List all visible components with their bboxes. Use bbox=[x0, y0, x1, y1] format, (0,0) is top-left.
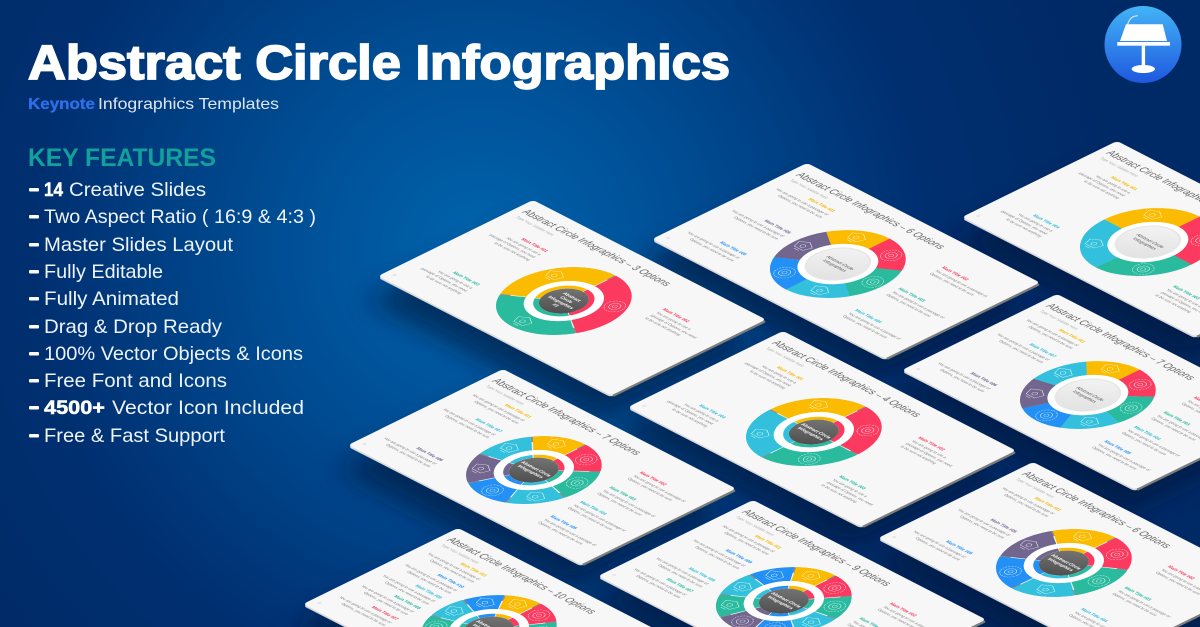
slide: 6 options, top centre: Infographics bbox=[820, 259, 848, 273]
slide: 6 options, top centre: You are going to use a passage of bbox=[890, 290, 947, 319]
slide: 10 options: Options, you need to be sure bbox=[428, 559, 477, 584]
slide: 7 options, left: Abstract Circle bbox=[519, 461, 553, 478]
slide: 7 options, left: Options, you need to be sure bbox=[566, 506, 615, 531]
slide: 10 options: Main Title #10 bbox=[436, 573, 466, 589]
slide: 6 options, top centre: You are going to use a passage of bbox=[774, 187, 831, 216]
slide: 7 options, right: Main Title #07 bbox=[1028, 343, 1058, 358]
slide: 10 options: Main Title #01 bbox=[459, 562, 489, 577]
slide: 7 options, right: Main Title #04 bbox=[1132, 425, 1163, 441]
slide: 7 options, right: Options, you need to be sure bbox=[1120, 431, 1169, 456]
slide: 6 options, top centre: Options, you need to be sure bbox=[732, 216, 781, 241]
slide: 4 options, centre: Type Your Subtitle Here bbox=[764, 346, 806, 368]
slide: 4 options, centre: Infographics bbox=[795, 426, 825, 441]
slide: 6 options, bottom right: Type Your Subtitle Here bbox=[1014, 477, 1056, 499]
slide: 7 options, right: You are going to use a passage of bbox=[936, 362, 993, 390]
slide: 9 options: Options, you need to be sure bbox=[694, 545, 742, 570]
slide: 10 options: Abstract Circle Infographics – 10 Options bbox=[443, 536, 599, 616]
slide: 6 options, top centre: Abstract Circle bbox=[824, 255, 856, 271]
slide: 9 options: Main Title #09 bbox=[724, 549, 754, 564]
slide: 7 options, left: You are going to use a passage of bbox=[382, 437, 439, 465]
slide: 7 options, left: You are going to use a passage of bbox=[632, 474, 688, 503]
slide: 10 options: Main Title #09 bbox=[414, 584, 444, 600]
slide: 3 options: Infographics bbox=[546, 295, 575, 310]
slide: 4 options, centre: to be sure not anything bbox=[820, 484, 860, 504]
slide: 7 options, right: Options, you need to be sure bbox=[1091, 446, 1139, 471]
slide: 9 options: Options, you need to be sure bbox=[723, 531, 771, 556]
slide: 4 options, centre: You are going to use a bbox=[760, 365, 799, 384]
slide: 10 options: You are going to use a passage of bbox=[403, 563, 460, 592]
slide: 6 options, top centre: Type Your Subtitle Here bbox=[788, 178, 830, 200]
slide: 4 options, centre: passage of Options, you need bbox=[666, 400, 716, 425]
slide: 4 options, centre: Main Title #01 bbox=[775, 366, 805, 381]
slide: 3 options: Type Your Subtitle Here bbox=[514, 215, 556, 237]
slide: 7 options, left: You are going to use a passage of bbox=[441, 408, 498, 437]
slide: 7 options, left: Main Title #02 bbox=[638, 471, 668, 486]
slide: 4 options, top right: Infographics bbox=[1130, 237, 1158, 251]
feature list: 14 bbox=[44, 179, 63, 201]
slide: 4 options, centre: You are going to use a bbox=[682, 403, 721, 423]
feature list bbox=[29, 179, 316, 447]
slide: 4 options, centre: to be sure not anything bbox=[748, 370, 788, 390]
slide: 10 options: You are going to use a passage of bbox=[381, 574, 438, 603]
feature list: 4500+ bbox=[44, 397, 105, 419]
slide: 7 options, left: Abstract Circle Infographics – 7 Options bbox=[488, 377, 644, 457]
slide: 6 options, bottom right: Main Title #02 bbox=[1166, 565, 1196, 580]
slide: 10 options: You are going to use a passage of bbox=[338, 595, 394, 624]
slide: 6 options, top centre: Options, you need to be sure bbox=[841, 314, 890, 339]
slide: 4 options, centre: to be sure not anything bbox=[671, 408, 710, 428]
slide: 4 options, top right: Main Title #01 bbox=[1109, 176, 1139, 191]
slide: 3 options: Main Title #01 bbox=[520, 237, 550, 253]
slide: 3 options: passage of Options, you need bbox=[649, 314, 699, 339]
slide: 7 options, left: You are going to use a passage of bbox=[601, 489, 658, 518]
slide: 7 options, left: You are going to use a passage of bbox=[471, 393, 527, 422]
feature list: Fully Animated bbox=[44, 288, 179, 310]
slide: 6 options, top centre: You are going to use a passage of bbox=[934, 269, 990, 298]
slide: 6 options, top centre: You are going to use a passage of bbox=[686, 231, 742, 260]
slide: 4 options, centre: passage of Options, you need bbox=[743, 362, 794, 387]
slide: 6 options, top centre: You are going to use a passage of bbox=[847, 312, 903, 341]
slide: 10 options: You are going to use a passage of bbox=[426, 552, 483, 581]
icon: keynote bbox=[1104, 6, 1182, 83]
slide: 7 options, right: Options, you need to be sure bbox=[998, 339, 1046, 364]
slide: 4 options, top right: passage of Options, you need bbox=[1077, 172, 1128, 197]
slide: 3 options: Main Title #03 bbox=[451, 271, 482, 286]
slide: 7 options, right: Main Title #01 bbox=[1057, 328, 1087, 344]
slide: 7 options, right: Options, you need to be sure bbox=[1150, 417, 1198, 442]
slide: 4 options, centre: Abstract Circle Infographics – 4 Options bbox=[768, 339, 924, 419]
slide: 9 options: Abstract Circle bbox=[769, 592, 803, 609]
slide: 3 options: You are going to use a bbox=[436, 270, 475, 290]
slide: 10 options: Options, you need to be sure bbox=[362, 591, 411, 616]
slide: 10 options bbox=[303, 528, 691, 627]
feature list: 100% Vector Objects & Icons bbox=[44, 343, 303, 365]
slide: 6 options, top centre: Main Title #03 bbox=[897, 287, 927, 303]
slide: 7 options, left: Options, you need to be sure bbox=[473, 400, 521, 425]
slide: 6 options, top centre: Main Title #02 bbox=[940, 266, 970, 281]
feature list: Drag & Drop Ready bbox=[44, 316, 222, 338]
slide: 9 options: Options, you need to be sure bbox=[657, 563, 705, 588]
slide: 6 options, top centre: Options, you need to be sure bbox=[688, 238, 737, 262]
slide: 9 options: Infographics bbox=[765, 595, 795, 610]
slide: 6 options, bottom right: You are going to use a passage of bbox=[1116, 589, 1173, 618]
slide: 7 options, left: Main Title #03 bbox=[608, 486, 638, 501]
slide: 9 options: You are going to use a passage of bbox=[632, 568, 689, 596]
slide: 7 options, right: Options, you need to be sure bbox=[939, 368, 987, 393]
slide: 3 options bbox=[378, 200, 766, 397]
slide: 7 options, left: Options, you need to be sure bbox=[626, 477, 675, 502]
slide: 6 options, bottom right: You are going to use a passage of bbox=[912, 530, 968, 559]
subtitle: Keynote bbox=[28, 96, 95, 113]
slide shadows bbox=[291, 165, 1200, 627]
feature list: Fully Editable bbox=[44, 261, 163, 283]
slide: 3 options: passage of Options, you need bbox=[488, 233, 538, 259]
slide: 7 options, right: You are going to use a passage of bbox=[1126, 429, 1182, 457]
slide: 10 options: Options, you need to be sure bbox=[405, 570, 454, 595]
slide: 4 options, top right: You are going to use a bbox=[1016, 213, 1055, 233]
slide: 9 options: You are going to use a passage of bbox=[721, 524, 777, 553]
slide: 9 options: Main Title #01 bbox=[753, 534, 783, 550]
slide: 4 options, centre: passage of Options, you need bbox=[905, 442, 955, 468]
slide: 6 options, bottom right: Infographics bbox=[1045, 557, 1075, 572]
slide: 7 options, right: You are going to use a passage of bbox=[1096, 443, 1153, 472]
slide: 7 options, right bbox=[902, 294, 1200, 491]
slide: 6 options, bottom right: Main Title #04 bbox=[1079, 608, 1110, 623]
slide: 7 options, left: Main Title #07 bbox=[474, 418, 504, 433]
heading: key features: KEY FEATURES bbox=[28, 144, 216, 172]
feature list: Free Font and Icons bbox=[44, 370, 227, 392]
slide: 7 options, left: Main Title #06 bbox=[415, 447, 445, 462]
slide: 4 options, centre: Abstract Circle bbox=[799, 423, 833, 440]
slide: 6 options, bottom right: Abstract Circle Infographics – 6 Options bbox=[1018, 470, 1174, 550]
slide: 7 options, right: Main Title #05 bbox=[1103, 440, 1133, 455]
slide: 4 options, top right: passage of Options, you need bbox=[1000, 210, 1050, 235]
slide: 4 options, centre: to be sure not anything bbox=[899, 445, 939, 465]
slide: 6 options, bottom right: You are going to use a passage of bbox=[956, 508, 1013, 537]
slide: 10 options: Main Title #08 bbox=[393, 595, 423, 610]
feature list: Creative Slides bbox=[69, 179, 206, 201]
slide: 9 options: Main Title #07 bbox=[665, 578, 695, 593]
slide: 10 options: Type Your Subtitle Here bbox=[439, 543, 481, 565]
slide: 9 options bbox=[598, 500, 986, 627]
slide: 4 options, centre: You are going to use a bbox=[831, 478, 870, 498]
slide: 7 options, right: You are going to use a passage of bbox=[995, 333, 1052, 362]
slide: 7 options, left: Options, you need to be sure bbox=[385, 443, 433, 468]
slide: 10 options: Options, you need to be sure bbox=[340, 602, 388, 627]
slide: 6 options, top centre: Options, you need to be sure bbox=[928, 272, 977, 297]
slide: 6 options, top centre: Options, you need to be sure bbox=[777, 194, 825, 219]
slide: 7 options, left: Options, you need to be sure bbox=[537, 521, 585, 546]
feature list: Free & Fast Support bbox=[44, 425, 226, 447]
slide: 7 options, right: You are going to use a passage of bbox=[1025, 318, 1081, 347]
slide: 7 options, right: Infographics bbox=[1070, 390, 1098, 404]
slide: 4 options, centre bbox=[628, 331, 1016, 528]
slide: 7 options, left: Options, you need to be sure bbox=[444, 414, 492, 439]
slide: 4 options, top right: You are going to use a bbox=[1094, 175, 1133, 194]
feature list: Two Aspect Ratio ( 16:9 & 4:3 ) bbox=[44, 206, 316, 228]
slide: 4 options, top right: Main Title #04 bbox=[1031, 214, 1062, 229]
slide: 9 options: You are going to use a passage of bbox=[691, 539, 748, 568]
slide: 6 options, bottom right: Main Title #03 bbox=[1123, 586, 1153, 602]
slide: 6 options, top centre bbox=[652, 163, 1040, 360]
slide: 9 options: Abstract Circle Infographics – 9 Options bbox=[738, 508, 894, 588]
slide: 4 options, top right: to be sure not anything bbox=[1082, 180, 1122, 200]
slide: 7 options, left: Type Your Subtitle Here bbox=[484, 384, 526, 406]
slide: 6 options, top centre: Options, you need to be sure bbox=[885, 293, 933, 318]
slide: 9 options: Type Your Subtitle Here bbox=[734, 515, 776, 537]
slide: 7 options, left bbox=[348, 369, 736, 566]
slide: 4 options, top right: Abstract Circle bbox=[1134, 233, 1166, 249]
slide: 9 options: Main Title #08 bbox=[687, 567, 717, 582]
slide: 3 options: Abstract bbox=[561, 292, 583, 303]
feature list: Master Slides Layout bbox=[44, 234, 234, 256]
slide: 9 options: Main Title #02 bbox=[888, 602, 918, 617]
slide: 7 options, left: Main Title #05 bbox=[549, 515, 579, 530]
slide: 7 options, left: Options, you need to be sure bbox=[596, 492, 644, 517]
slide: 7 options, right: Options, you need to be sure bbox=[1027, 325, 1075, 350]
slide: 3 options: to be sure not anything bbox=[493, 241, 533, 262]
slide: 6 options, bottom right bbox=[878, 462, 1200, 627]
slide: 3 options: to be sure not anything bbox=[424, 275, 464, 295]
slide: 6 options, bottom right: Main Title #01 bbox=[1033, 497, 1063, 512]
slide: 4 options, top right: to be sure not anything bbox=[1154, 294, 1194, 314]
slide: 6 options, bottom right: You are going to use a passage of bbox=[1000, 486, 1057, 515]
slide: 9 options: You are going to use a passage of bbox=[654, 557, 711, 586]
slide: 7 options, right: Type Your Subtitle Here bbox=[1038, 309, 1080, 331]
slide: 7 options, left: You are going to use a passage of bbox=[572, 504, 628, 532]
slide: 3 options: You are going to use a bbox=[505, 236, 544, 256]
slide: 6 options, top centre: Main Title #06 bbox=[763, 219, 793, 235]
slide: 9 options: Options, you need to be sure bbox=[635, 574, 683, 599]
slide: 6 options, top centre: You are going to use a passage of bbox=[730, 209, 787, 238]
subtitle bbox=[28, 96, 279, 113]
slide: 6 options, bottom right: Options, you need to be sure bbox=[914, 537, 963, 561]
slide: 6 options, bottom right: Options, you need to be sure bbox=[958, 515, 1007, 540]
slide: 7 options, left: You are going to use a passage of bbox=[542, 518, 599, 547]
slide: 4 options, top right bbox=[962, 141, 1200, 338]
slide: 7 options, right: Abstract Circle Infographics – 7 Options bbox=[1042, 302, 1198, 382]
slide: 4 options, centre: Main Title #04 bbox=[697, 404, 728, 419]
slide: 3 options: You are going to use a bbox=[655, 311, 694, 331]
slide: 10 options: Options, you need to be sure bbox=[383, 581, 432, 606]
slide: 6 options, bottom right: Main Title #06 bbox=[989, 518, 1019, 534]
slide: 6 options, bottom right: Options, you need to be sure bbox=[1003, 493, 1051, 518]
slide: 6 options, top centre: Main Title #04 bbox=[853, 309, 884, 324]
feature list: Vector Icon Included bbox=[112, 397, 304, 419]
slide: 7 options, right: Main Title #06 bbox=[969, 372, 999, 387]
slide: 7 options, left: Main Title #04 bbox=[578, 500, 609, 516]
slide: 6 options, bottom right: Options, you need to be sure bbox=[1111, 592, 1159, 617]
slide: 4 options, centre: You are going to use a bbox=[910, 439, 949, 459]
slide: 6 options, top centre: Abstract Circle Infographics – 6 Options bbox=[792, 171, 948, 251]
slide: 3 options: Abstract Circle Infographics – 3 Options bbox=[518, 208, 674, 288]
slide: 10 options: You are going to use a passage of bbox=[360, 584, 416, 613]
slide: 4 options, top right: Type Your Subtitle Here bbox=[1098, 156, 1140, 178]
slide: 3 options: Main Title #02 bbox=[661, 308, 691, 323]
slide: 4 options, top right: to be sure not anything bbox=[1005, 218, 1044, 238]
slide: 6 options, top centre: Main Title #05 bbox=[718, 241, 749, 256]
slide: 4 options, centre: Main Title #03 bbox=[838, 475, 868, 490]
slide: 7 options, right: Abstract Circle bbox=[1074, 386, 1106, 402]
slide: 6 options, bottom right: Abstract Circle bbox=[1049, 554, 1083, 571]
title: Abstract Circle Infographics bbox=[28, 37, 730, 90]
slide: 4 options, centre: passage of Options, you need bbox=[825, 481, 876, 506]
slide: 7 options, right: Main Title #03 bbox=[1162, 411, 1192, 426]
slide: 3 options: to be sure not anything bbox=[644, 316, 683, 337]
slide: 3 options: Circle bbox=[558, 296, 575, 304]
slide: 3 options: passage of Options, you need bbox=[419, 267, 470, 292]
subtitle: Infographics Templates bbox=[98, 96, 279, 113]
slide: 4 options, centre: Main Title #02 bbox=[917, 436, 947, 451]
slide: 10 options: Main Title #07 bbox=[370, 606, 400, 621]
slide: 7 options, left: Main Title #01 bbox=[503, 403, 533, 419]
slide: 7 options, left: Infographics bbox=[515, 464, 545, 479]
slide: 3 options: #3 bbox=[550, 303, 560, 308]
slide: 6 options, top centre: Main Title #01 bbox=[807, 198, 837, 213]
slide: 6 options, bottom right: Main Title #05 bbox=[944, 540, 975, 555]
